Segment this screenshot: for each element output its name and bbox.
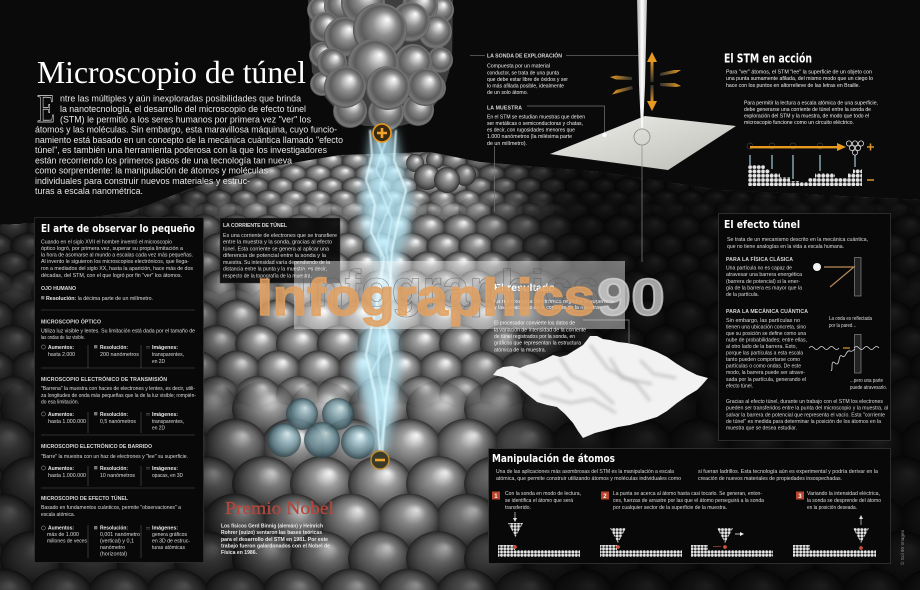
panel: El efecto túnel: al otro lado de la barrera. Esto, <box>726 344 797 350</box>
panel: Manipulación de átomos <box>488 448 890 564</box>
section: microscopio electrónico de transmisión: Aumentos: <box>48 412 74 418</box>
callout: la sonda de exploración: lo más afilada posible, idealmente <box>487 84 564 90</box>
section: microscopio electrónico de barrido: MICROSCOPIO ELECTRÓNICO DE BARRIDO <box>41 442 152 450</box>
panel: Manipulación de átomos: si fueran ladrillos. Esta tecnología aún es experimental y podría derivar en la <box>698 469 878 475</box>
section: microscopio de efecto túnel: Basado en fundamentos cuánticos, permite "observaciones" a <box>41 505 181 511</box>
callout: la sonda de exploración: Compuesta por un material <box>487 64 550 70</box>
panel: El efecto túnel: (barrera de potencial) si la ener- <box>726 279 800 285</box>
step 2: ces, fuerzas de arrastre por las que el átomo perseguirá a la sonda <box>613 498 764 504</box>
intro text block: están recorriendo los primeros pasos de una tecnología tan nueva <box>35 156 293 166</box>
text block: Premio Nobel: Premio Nobel <box>225 498 334 518</box>
intro text block: (STM) le permitió a los seres humanos por primera vez "ver" los <box>60 114 311 126</box>
diagram: scanning over atoms <box>747 141 874 186</box>
step 2 <box>600 491 773 557</box>
section: El STM en acción: El STM en acción <box>724 52 812 66</box>
section: microscopio óptico: en 2D <box>152 359 165 365</box>
intro text block: turas a escala nanométrica. <box>35 186 143 197</box>
illustration: sample plane and probe needle <box>550 0 736 262</box>
section: microscopio de efecto túnel: Resolución: <box>100 526 128 532</box>
intro text block: ntre las múltiples y aún inexploradas posibilidades que brinda <box>60 94 302 104</box>
section: microscopio de efecto túnel: Imágenes: <box>152 526 178 532</box>
section: microscopio óptico <box>41 318 195 365</box>
panel: El efecto túnel: tanto pueden comportarse como <box>726 357 800 363</box>
callout: la sonda de exploración: de un solo átomo. <box>487 90 528 96</box>
section: microscopio electrónico de transmisión <box>41 375 196 432</box>
intro text block: individuales para construir nuevos materiales y estruc- <box>35 176 250 187</box>
intro text block: la nanotecnología, el desarrollo del microscopio de efecto túnel <box>60 104 306 115</box>
panel: La corriente de túnel: LA CORRIENTE DE TÚNEL <box>223 222 288 229</box>
panel: El efecto túnel: muestra que se desea estudiar. <box>726 426 797 432</box>
title: Microscopio de túnel <box>37 54 306 90</box>
section: microscopio óptico: las ondas de luz visible. <box>41 335 85 341</box>
panel: El resultado <box>494 283 614 353</box>
step 2: 2 <box>603 494 607 500</box>
panel: El arte de observar lo pequeño: ron a mediados del siglo XX, hasta la aparición, hace más de dos <box>41 266 193 272</box>
panel: El arte de observar lo pequeño: OJO HUMANO <box>41 286 76 292</box>
section: microscopio electrónico de barrido: Aumentos: <box>48 466 74 472</box>
step 3: Variando la intensidad eléctrica, <box>807 491 880 497</box>
panel: El arte de observar lo pequeño: Resolución: la décima parte de un milímetro. <box>46 296 153 302</box>
intro text block <box>35 86 343 197</box>
callout: la muestra: 1.000 nanómetros (la milésima parte <box>487 134 572 140</box>
blue highlighted atoms <box>267 398 375 459</box>
section: microscopio electrónico de barrido: "Barre" la muestra con un haz de electrones y "lee" su superficie. <box>41 454 188 460</box>
panel: El arte de observar lo pequeño: décadas, del STM, con el que logró por fin "ver" los átomos. <box>41 273 182 279</box>
callout: la sonda de exploración <box>470 52 640 96</box>
section: El STM en acción: una punta sumamente afilada, del mismo modo que un ciego lo <box>726 76 873 82</box>
panel: El efecto túnel: tienen una ubicación concreta, sino <box>726 324 806 330</box>
section: microscopio electrónico de transmisión: hasta 1.000.000 <box>48 419 86 425</box>
panel: El efecto túnel: El efecto túnel <box>724 218 800 231</box>
panel: El resultado: La microscopía electrónica registra la superficie <box>494 299 614 305</box>
section: microscopio óptico: transparentes, <box>152 352 184 358</box>
section: microscopio de efecto túnel: (horizontal) <box>100 552 127 558</box>
section: microscopio electrónico de barrido: Imágenes: <box>152 466 178 472</box>
section: microscopio de efecto túnel: 0,001 nanómetro <box>100 532 140 538</box>
panel: Manipulación de átomos: Manipulación de átomos <box>492 452 615 465</box>
panel: El resultado: de túnel registrados por la sonda, en <box>494 334 575 340</box>
step 1: se identifica el átomo que será <box>505 498 573 504</box>
callout: la muestra: de un milímetro). <box>487 141 527 147</box>
section: microscopio electrónico de transmisión: do esa limitación. <box>41 400 79 406</box>
panel: El arte de observar lo pequeño: la hora de asomarse al mundo a escalas cada vez más pequeñas. <box>41 252 193 258</box>
panel: El efecto túnel: salvar la barrera de potencial que representa el vacío. Esta "corriente <box>726 412 885 418</box>
panel: El efecto túnel: de la partícula. <box>726 292 759 298</box>
panel: El efecto túnel: de túnel" es medida para determinar la posición de los átomos en la <box>726 419 881 425</box>
callout: la sonda de exploración: que debe estar libre de óxidos y ser <box>487 77 568 83</box>
diagram: quantum wave through barrier: por la pared... <box>829 323 856 329</box>
panel: El efecto túnel: Sin embargo, las partículas no <box>726 318 800 324</box>
panel: El efecto túnel: sada por la partícula, generando el <box>726 377 806 383</box>
panel: El efecto túnel <box>718 214 890 440</box>
panel: El arte de observar lo pequeño: óptico logró, por primera vez, superar su propia limitación a <box>41 246 183 252</box>
panel: El efecto túnel: PARA LA MECÁNICA CUÁNTICA <box>726 308 808 315</box>
section: microscopio de efecto túnel: turas atómicas <box>152 545 185 551</box>
section: microscopio de efecto túnel <box>41 495 190 558</box>
section: microscopio de efecto túnel: millones de veces <box>47 538 87 544</box>
panel: El arte de observar lo pequeño: Cuando en el siglo XVII el hombre inventó el microscopio <box>41 240 172 246</box>
text block: Premio Nobel <box>221 498 334 556</box>
probe tip: atom cluster <box>307 0 454 131</box>
watermark: Infographics <box>257 269 595 327</box>
section: microscopio óptico: Imágenes: <box>152 345 178 351</box>
panel: El efecto túnel: gía de la barrera es mayor que la <box>726 286 802 292</box>
panel: El efecto túnel: porque las partículas a esta escala <box>726 350 803 356</box>
chart: terrain graph from the STM <box>493 320 708 438</box>
panel: El resultado: y las variaciones de la corriente de la muestra <box>494 305 600 311</box>
panel: El resultado: atómica de la muestra. <box>494 347 546 353</box>
callout: la muestra <box>487 106 604 212</box>
panel: El arte de observar lo pequeño: Al invento le siguieron los microscopios electrónicos, que llega- <box>41 259 189 265</box>
section: microscopio óptico: Resolución: <box>100 345 128 351</box>
step 3: en la posición deseada. <box>807 505 857 511</box>
step 3: 3 <box>798 494 802 500</box>
panel: El resultado: El resultado <box>494 283 555 294</box>
section: microscopio electrónico de transmisión: transparentes, <box>152 419 184 425</box>
panel: La corriente de túnel: túnel. Esta corriente se genera al aplicar una <box>223 246 329 252</box>
section: microscopio óptico: Utiliza luz visible y lentes. Su limitación está dada por el tamaño de <box>41 328 195 334</box>
section: microscopio óptico: hasta 2.000 <box>48 352 75 358</box>
panel: La corriente de túnel: muestra. Su intensidad varía dependiendo de la <box>223 260 330 266</box>
watermark <box>257 260 665 329</box>
step 2: La punta se acerca al átomo hasta casi tocarlo. Se generan, enton- <box>613 491 762 497</box>
section: microscopio electrónico de transmisión: en 2D <box>152 426 165 432</box>
section: El STM en acción: exploración del STM y la muestra, de modo que todo el <box>744 114 869 120</box>
panel: La corriente de túnel: Es una corriente de electrones que se transfiere <box>223 233 337 239</box>
section: microscopio de efecto túnel: escala atómica. <box>41 512 75 518</box>
section: microscopio electrónico de transmisión: MICROSCOPIO ELECTRÓNICO DE TRANSMISIÓN <box>41 375 167 383</box>
text block: Premio Nobel: trabajo fueron galardonados con el Nobel de <box>221 544 330 550</box>
step 2: por cualquier sector de la superficie de la muestra. <box>613 505 727 511</box>
panel: El efecto túnel: efecto túnel. <box>726 384 753 390</box>
panel: El efecto túnel: Se trata de un mecanismo descrito en la mecánica cuántica, <box>727 237 868 243</box>
step 1: Con la sonda en modo de lectura, <box>505 491 581 497</box>
panel: El efecto túnel: partículas o como ondas. De este <box>726 364 801 370</box>
panel heading: El arte de observar lo pequeño <box>41 222 195 235</box>
section: El STM en acción <box>724 52 878 186</box>
watermark: Infographics <box>300 260 600 318</box>
step 1: transferido. <box>505 505 531 511</box>
callout: la muestra: ser metálicas o semiconductoras y chatas, <box>487 121 583 127</box>
section: El STM en acción: microscopio funcione como un circuito eléctrico. <box>744 120 854 126</box>
panel: El efecto túnel: PARA LA FÍSICA CLÁSICA <box>726 255 793 263</box>
panel: El resultado: gráficos que representan la estructura <box>494 341 582 347</box>
panel: El efecto túnel: nube de probabilidades; entre ellas, <box>726 338 807 344</box>
section: microscopio de efecto túnel: nanómetro <box>100 545 125 551</box>
image credit: © Sol 90 Images <box>899 529 905 565</box>
section: El STM en acción: hace con los puntos en altorrelieve de las letras en Braille. <box>726 83 860 89</box>
diagram: quantum wave through barrier: ...pero una parte <box>850 378 883 384</box>
panel: La corriente de túnel: diferencia de potencial entre la sonda y la <box>223 253 326 259</box>
text block: Premio Nobel: Los físicos Gerd Binnig (alemán) y Heinrich <box>221 524 323 530</box>
panel: Manipulación de átomos: creación de nuevos materiales de propiedades insospechadas. <box>698 476 842 482</box>
diagram: classical particle bouncing <box>813 258 861 296</box>
callout: la muestra: En el STM se estudian muestras que deben <box>487 114 585 120</box>
watermark: 90 <box>597 269 665 327</box>
section: microscopio electrónico de barrido: 10 nanómetros <box>100 473 135 479</box>
section: microscopio óptico: MICROSCOPIO ÓPTICO <box>41 318 101 326</box>
diagram: quantum wave through barrier: puede atravesarlo. <box>850 385 887 391</box>
step 3: la sonda se desprende del átomo <box>807 498 881 504</box>
panel: El efecto túnel: que no tiene analogías en la vida a escala humana. <box>727 244 844 250</box>
step 1 <box>492 491 581 557</box>
callout: la sonda de exploración: LA SONDA DE EXPLORACIÓN <box>487 52 562 60</box>
panel: El efecto túnel: atravesar una barrera energética <box>726 272 802 278</box>
section: microscopio electrónico de transmisión: za longitudes de onda más pequeñas que la de la luz visible; rompién- <box>41 393 196 399</box>
panel: Manipulación de átomos: Una de las aplicaciones más asombrosas del STM es la manipulación a escala <box>496 469 674 475</box>
callout: la muestra: LA MUESTRA <box>487 106 522 112</box>
panel: La corriente de túnel: respecto de la topografía de la muestra. <box>223 274 312 280</box>
intro text block: átomos y las moléculas. Sin embargo, esta maravillosa máquina, cuyo funcio- <box>35 124 337 136</box>
diagram: quantum wave through barrier <box>809 316 887 391</box>
positive charge marker <box>373 124 391 142</box>
section: microscopio electrónico de transmisión: Resolución: <box>100 412 128 418</box>
section: microscopio electrónico de transmisión: "Barrena" la muestra con haces de electrones y lentes, es decir, utili- <box>41 386 195 392</box>
panel: El efecto túnel: que su posición se define como una <box>726 331 806 337</box>
panel: El resultado: la variación de intensidad de la corriente <box>494 327 586 333</box>
panel: El resultado: El procesador convierte los datos de <box>494 320 575 326</box>
drop cap: E <box>37 86 55 131</box>
intro text block: namiento está basado en un concepto de la mecánica cuántica llamado "efecto <box>35 135 343 146</box>
intro text block: como sorprendente: la manipulación de átomos y moléculas <box>35 166 268 176</box>
section: microscopio de efecto túnel: más de 1.000 <box>47 532 79 538</box>
callout: la sonda de exploración: conductor, se trata de una punta <box>487 70 560 76</box>
section: microscopio de efecto túnel: en 3D de estruc- <box>152 538 190 544</box>
section: microscopio electrónico de barrido: Resolución: <box>100 466 128 472</box>
panel: La corriente de túnel: entre la muestra y la sonda, gracias al efecto <box>223 240 332 246</box>
panel: El efecto túnel: pueden ser transferidos entre la punta del microscopio y la muestra, al <box>726 406 888 412</box>
panel: El efecto túnel: modo, la barrera puede ser atrave- <box>726 370 805 376</box>
negative charge marker <box>371 451 389 469</box>
text block: Premio Nobel: Física en 1986. <box>221 550 257 556</box>
section: microscopio de efecto túnel: Aumentos: <box>48 526 74 532</box>
section: microscopio de efecto túnel: genera gráficos <box>152 532 187 538</box>
sphere field: sample surface <box>0 152 920 590</box>
panel: El efecto túnel: Gracias al efecto túnel, durante un trabajo con el STM los electrones <box>726 399 883 405</box>
section: microscopio óptico: Aumentos: <box>48 345 74 351</box>
section: microscopio electrónico de transmisión: Imágenes: <box>152 412 178 418</box>
text block: Premio Nobel: para el desarrollo del STM en 1981. Por este <box>221 537 328 543</box>
step 3 <box>793 491 881 557</box>
panel: La corriente de túnel <box>220 218 340 283</box>
section: microscopio electrónico de barrido <box>41 442 188 479</box>
section: microscopio electrónico de barrido: opacas, en 3D <box>152 473 183 479</box>
callout: la muestra: es decir, con rugosidades menores que <box>487 128 575 134</box>
panel: El arte de observar lo pequeño <box>34 218 204 562</box>
intro text block: túnel", es también una herramienta poderosa con la que los investigadores <box>35 145 327 156</box>
panel: Manipulación de átomos: atómica, que permite construir utilizando átomos y moléculas individuales como <box>496 476 681 482</box>
section: microscopio óptico: 200 nanómetros <box>100 352 139 358</box>
section: microscopio de efecto túnel: (vertical) y 0,1 <box>100 538 134 544</box>
section: microscopio electrónico de transmisión: 0,5 nanómetros <box>100 419 136 425</box>
section: microscopio electrónico de barrido: hasta 1.000.000 <box>48 473 86 479</box>
section: El STM en acción: Para permitir la lectura a escala atómica de una superficie, <box>744 100 878 106</box>
section: El STM en acción: debe generarse una corriente de túnel entre la sonda de <box>744 107 871 113</box>
panel: La corriente de túnel: distancia entre la punta y la muestra, es decir, <box>223 267 327 273</box>
section: microscopio de efecto túnel: MICROSCOPIO DE EFECTO TÚNEL <box>41 495 129 502</box>
arrows: scanning directions <box>610 52 681 111</box>
diagram: quantum wave through barrier: La onda es reflectada <box>829 316 872 322</box>
panel: El efecto túnel: Una partícula no es capaz de <box>726 266 792 272</box>
section: El STM en acción: Para "ver" átomos, el STM "lee" la superficie de un objeto con <box>726 70 872 76</box>
step 1: 1 <box>494 494 498 500</box>
tunnel current beam <box>354 130 412 455</box>
text block: Premio Nobel: Rohrer (suizo) sentaron las bases teóricas <box>221 530 322 536</box>
